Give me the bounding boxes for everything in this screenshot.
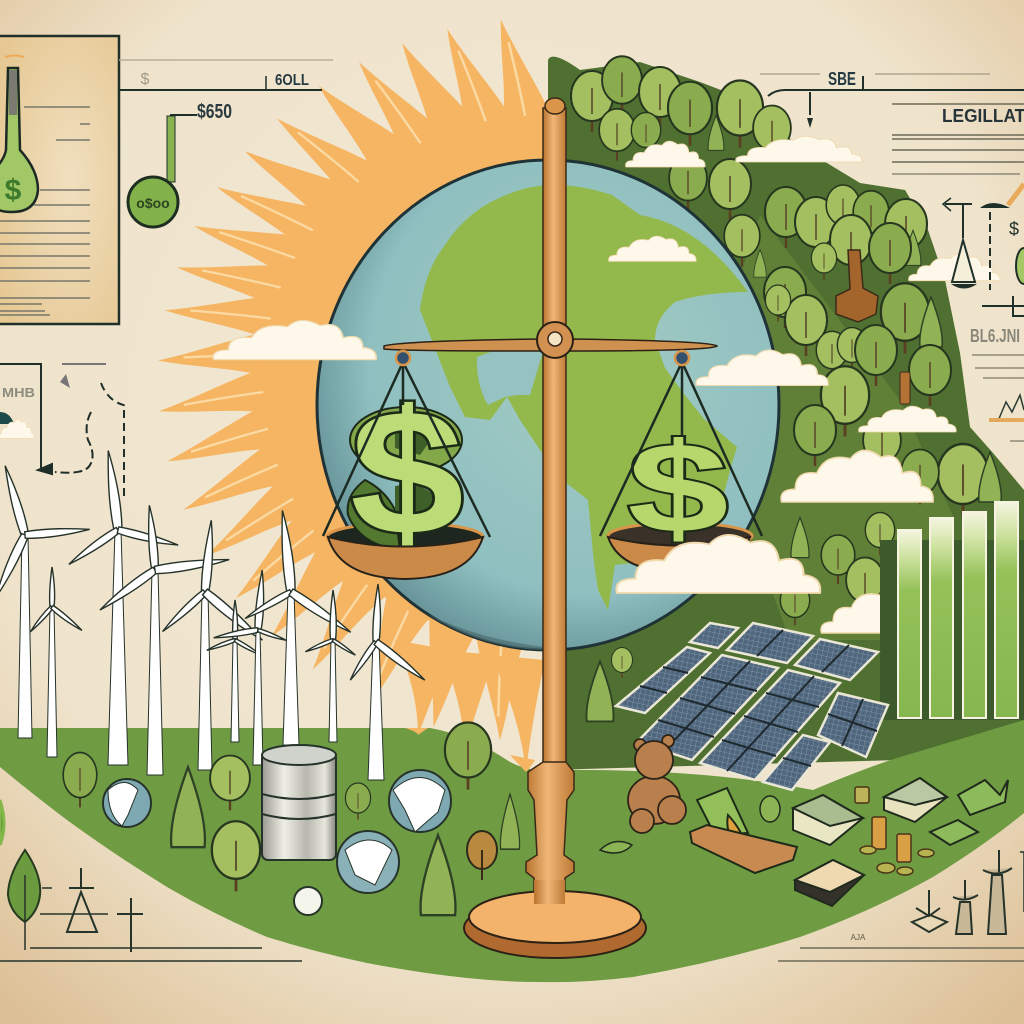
- forest trees: [571, 56, 1001, 721]
- header: SBE: SBE: [828, 69, 856, 89]
- left ropes: [323, 362, 490, 537]
- tray with green note: [690, 788, 797, 873]
- base: [464, 898, 646, 958]
- cloud: globe right edge: [696, 350, 828, 386]
- cloud: top centre: [626, 141, 705, 167]
- chimney: [836, 250, 878, 322]
- icon: pylon: [67, 868, 97, 932]
- icon: flask: [0, 68, 38, 212]
- header: SBE: [760, 69, 1024, 128]
- forest hillside: [548, 57, 1024, 770]
- left pan back: [327, 523, 483, 551]
- bay: [476, 352, 542, 405]
- panel: mid-left label: [0, 364, 41, 470]
- globe: [317, 160, 779, 660]
- finial: [545, 98, 565, 114]
- cloud: behind icons: [909, 254, 1000, 281]
- shaded lower rim: [428, 614, 568, 650]
- lower-right notes and mountain: [972, 355, 1024, 441]
- bar chart: [880, 502, 1024, 720]
- cloud: forest: [859, 406, 956, 432]
- right pan back: [608, 523, 752, 549]
- panel: mid-left label: MHB: [2, 385, 35, 400]
- hub: [537, 322, 573, 358]
- right bowl: [608, 537, 750, 572]
- metal can: [262, 745, 336, 860]
- balance diagram icons: $: [1009, 219, 1019, 239]
- beam: [384, 339, 717, 351]
- sun rays at horizon: [395, 640, 542, 758]
- coins: [855, 787, 934, 875]
- lower-left icons: [0, 850, 302, 961]
- cloud: over right pan: [616, 535, 820, 593]
- cloud: forest large: [781, 450, 933, 502]
- callout: $650 green dial: o$oo: [136, 195, 170, 211]
- legislation text block: [892, 104, 1024, 174]
- left leaf lower: [348, 480, 400, 550]
- ground trees: [63, 722, 520, 915]
- panel: top-left document: [0, 36, 119, 324]
- sun ray tips over ground: [405, 728, 535, 772]
- cloud: lower forest: [821, 588, 950, 633]
- scale: [323, 98, 762, 958]
- panel: top-left document: $: [5, 174, 22, 207]
- sun: [158, 20, 545, 740]
- left leaf upper: [350, 407, 462, 473]
- cloud: over globe: [609, 236, 696, 261]
- ground: [0, 720, 1024, 982]
- header line: SOLL: [119, 60, 333, 90]
- balance diagram icons: [909, 184, 1024, 316]
- counters: [395, 426, 438, 515]
- icon: leaf: [8, 850, 40, 922]
- dashed arrows: [38, 364, 127, 498]
- header line: SOLL: $: [141, 71, 150, 88]
- left bowl: [328, 537, 483, 579]
- left dollar: $: [350, 373, 464, 572]
- leaves: [0, 796, 780, 853]
- turned column: [526, 762, 574, 902]
- lower-right pylons and rules: [778, 850, 1024, 961]
- cloud: left of globe: [213, 320, 376, 360]
- callout: $650 green dial: $650: [197, 101, 232, 123]
- mini globes: [103, 770, 451, 915]
- icon: cross: [117, 898, 143, 952]
- right ropes: [600, 362, 762, 536]
- right dollar: $: [627, 417, 729, 560]
- continents: [420, 185, 748, 610]
- lower-right pylons and rules: AJA: [851, 933, 866, 942]
- money stacks: [793, 778, 947, 906]
- hooks: [396, 351, 410, 365]
- cloud: top right: [736, 136, 862, 162]
- teddy bear: [628, 735, 686, 833]
- wind turbines: [0, 450, 427, 780]
- callout: $650 green dial: [128, 101, 232, 227]
- green notes: [930, 780, 1008, 845]
- small balance: [952, 204, 975, 282]
- wooden post: [900, 372, 910, 404]
- pole: [543, 108, 566, 773]
- header line: SOLL: 6OLL: [275, 72, 309, 89]
- lamp post: [980, 203, 1010, 208]
- solar array: [616, 623, 888, 790]
